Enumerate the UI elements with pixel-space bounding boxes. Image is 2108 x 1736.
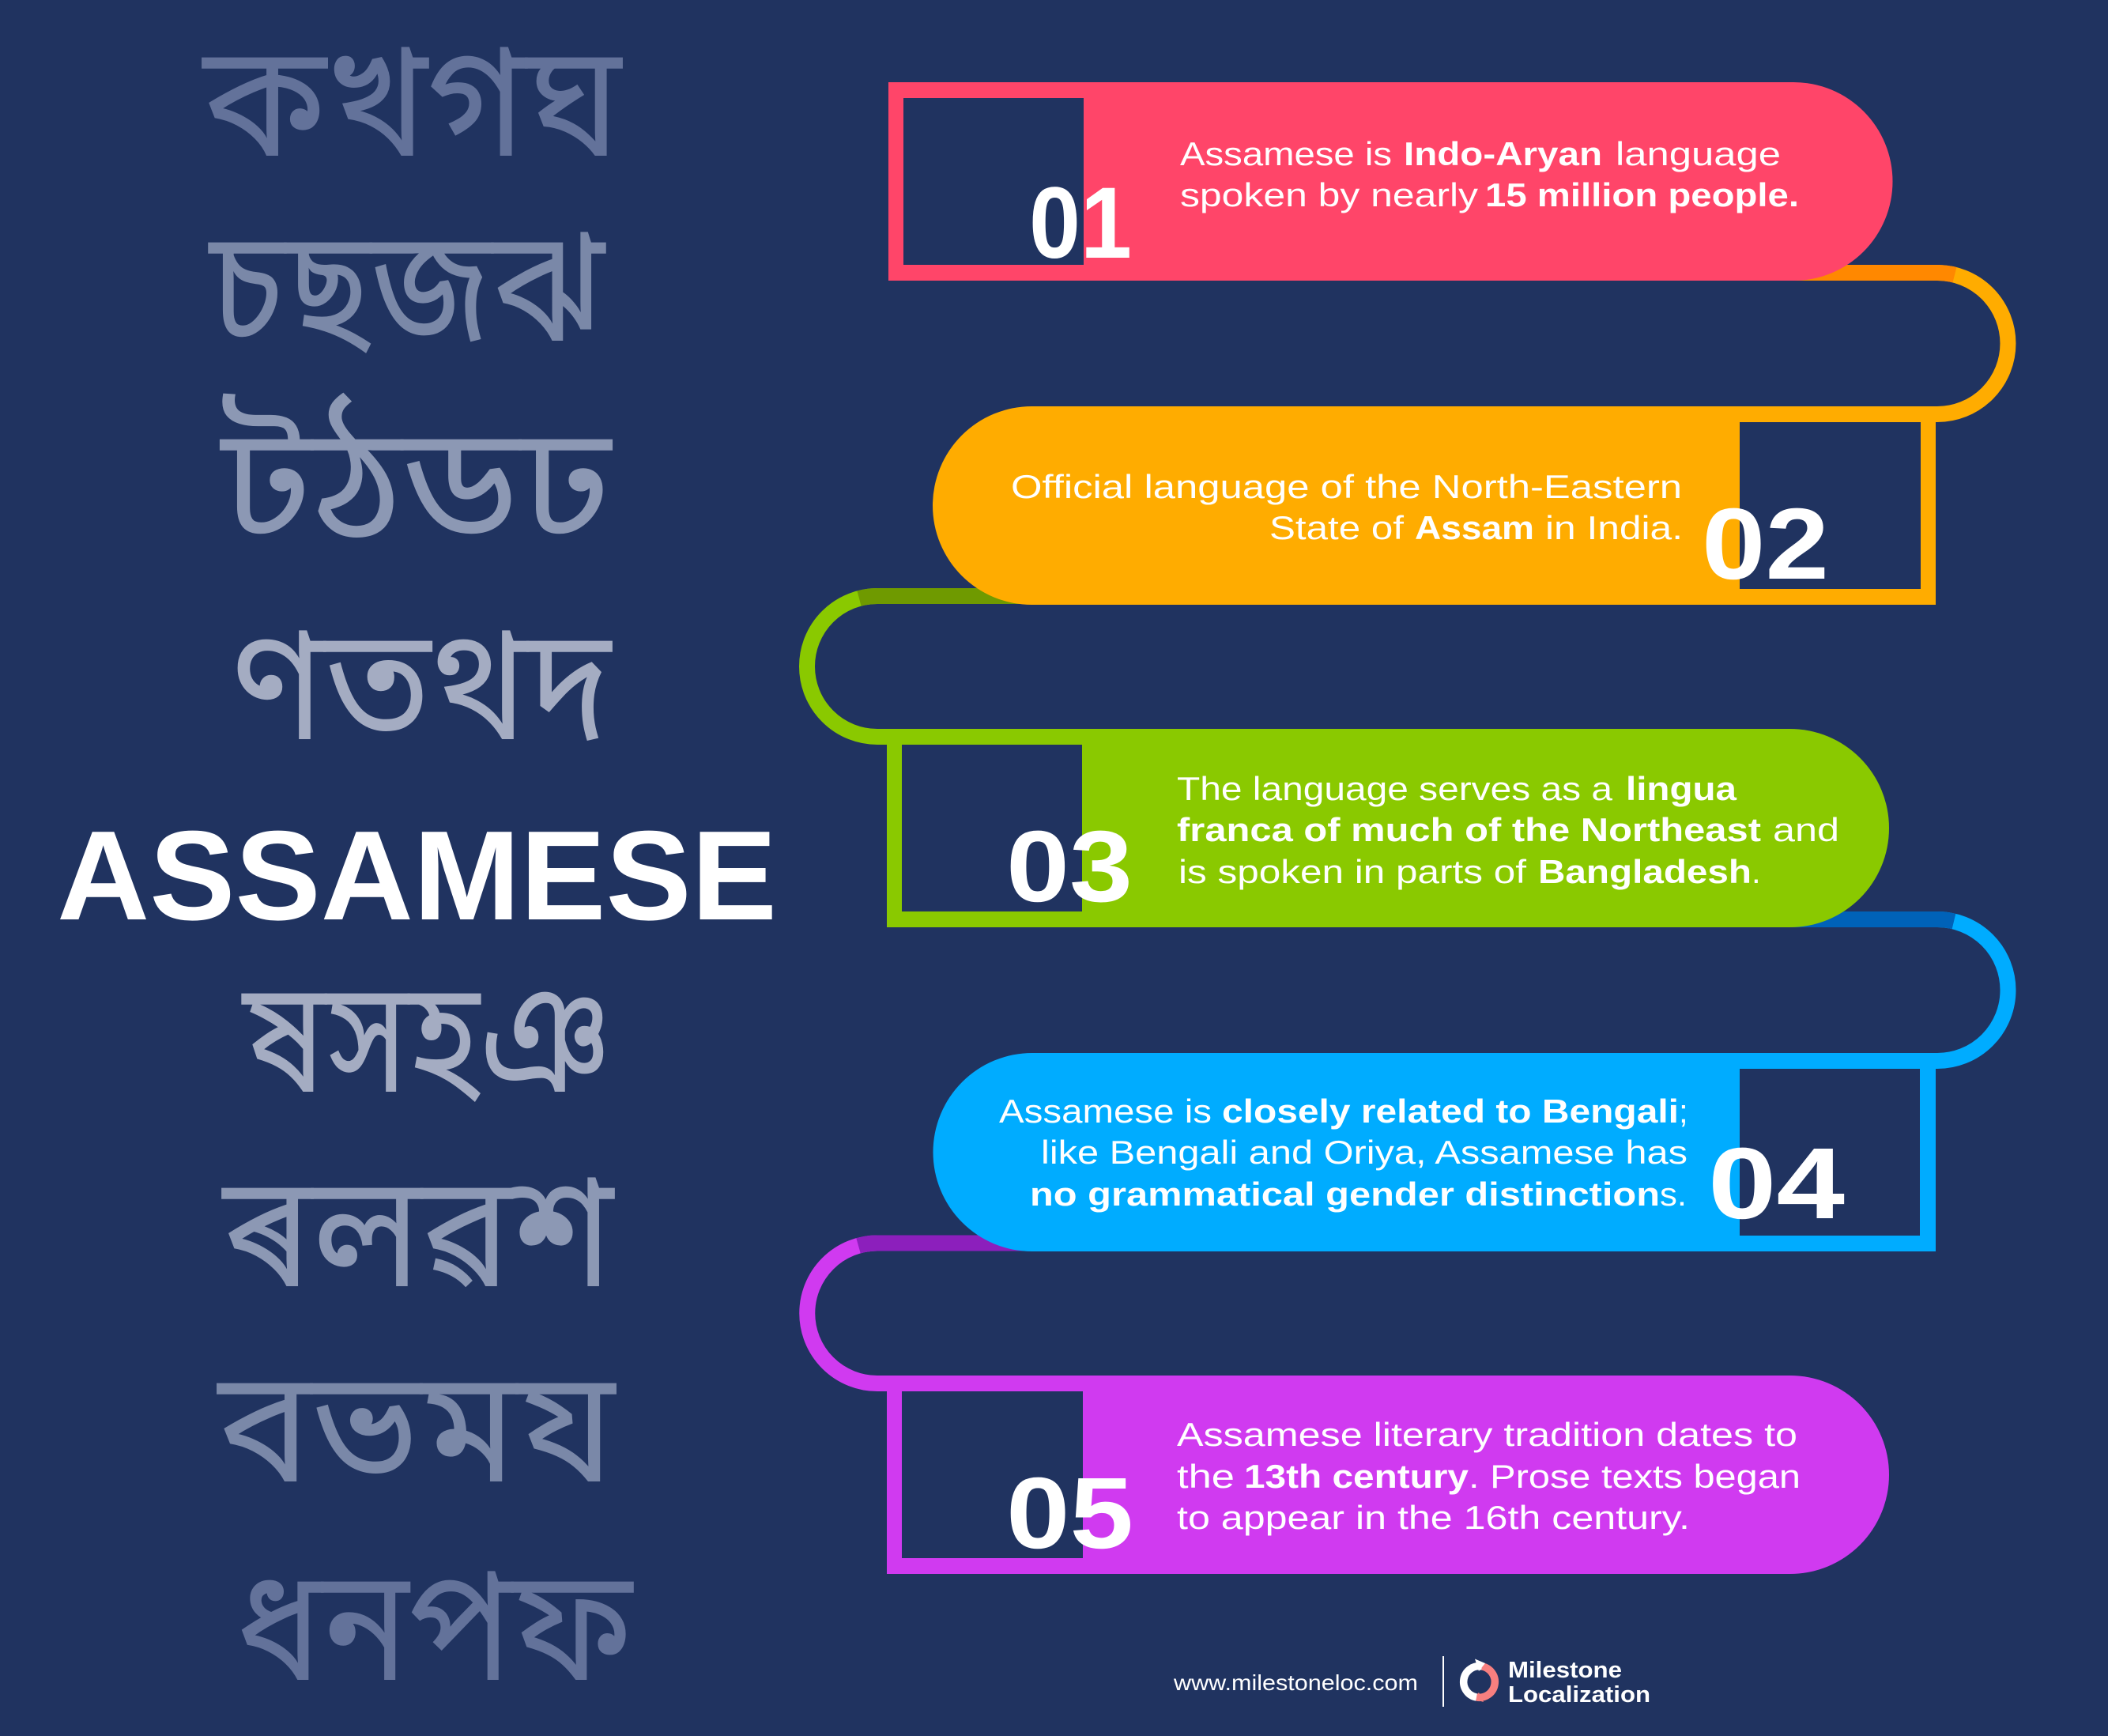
panel text: closely related to Bengali: [1222, 1093, 1679, 1130]
panel text: franca of much of the Northeast: [1177, 811, 1761, 848]
panel text: to appear in the 16th century.: [1177, 1499, 1690, 1536]
number 01: 01: [1029, 167, 1132, 280]
title: ASSAMESE: ASSAMESE: [57, 805, 777, 947]
panel shape: [933, 406, 1936, 605]
number 03: 03: [1006, 810, 1133, 923]
number box: [902, 745, 1082, 911]
number 02: 02: [1702, 488, 1829, 601]
panel text: like Bengali and Oriya, Assamese has: [1041, 1134, 1688, 1171]
panel 05: purple: [887, 1376, 1889, 1574]
number box: [1740, 1069, 1920, 1236]
panel shape: [888, 82, 1892, 281]
panel text: The language serves as a: [1177, 770, 1613, 807]
script row: ra la wa sha: ৰলৱশ: [221, 1144, 616, 1320]
connector: red to orange: [1739, 273, 2008, 414]
panel text: 15 million people.: [1485, 176, 1799, 213]
panel text: Assam: [1415, 509, 1534, 546]
script row: ba bha ma ya: বভময: [217, 1339, 617, 1515]
brand name: Localization: [1508, 1682, 1650, 1708]
script row: cha chha ja jha: চছজঝ: [208, 198, 606, 375]
script row: dha na pa pha: ধনপফ: [236, 1538, 634, 1714]
brand name: [1508, 1658, 1650, 1708]
panel text: no grammatical gender distinction: [1030, 1176, 1660, 1213]
panel text: is spoken in parts of: [1178, 853, 1526, 890]
panel text: the: [1177, 1458, 1235, 1495]
footer: [1173, 1656, 1650, 1708]
panel shape: [887, 729, 1889, 927]
brand name: Milestone: [1508, 1658, 1622, 1683]
script row: na ta tha da: ণতথদ: [232, 597, 613, 773]
panel 03: green: [887, 729, 1889, 927]
panel text: s.: [1660, 1176, 1687, 1213]
panel text: Assamese is: [999, 1093, 1212, 1130]
connector: orange to green: [807, 596, 1083, 737]
number 04: 04: [1708, 1127, 1845, 1240]
number box: [902, 1391, 1083, 1558]
panel text: Assamese literary tradition dates to: [1177, 1416, 1797, 1453]
panel text: in India.: [1545, 509, 1683, 546]
panel text: Assamese is: [1180, 135, 1392, 172]
panel text: lingua: [1626, 770, 1737, 807]
connector: green to blue: [1739, 919, 2008, 1061]
panel text: Bangladesh: [1538, 853, 1752, 890]
number box: [1740, 422, 1921, 589]
panel text: ;: [1679, 1093, 1688, 1130]
panel text: .: [1752, 853, 1761, 890]
panel text: [1177, 1416, 1801, 1536]
panel text: 13th century: [1244, 1458, 1469, 1495]
panel text: [1180, 135, 1799, 213]
script row: ka kha ga gha: কখগঘ: [202, 13, 624, 190]
panel text: . Prose texts began: [1469, 1458, 1801, 1495]
script rows and title column: [57, 13, 777, 1714]
panel text: [1177, 770, 1839, 890]
script row: ta tha da dha: টঠডঢ: [220, 391, 613, 572]
panel shape: [933, 1053, 1936, 1251]
panel text: State of: [1269, 509, 1404, 546]
panel 04: blue: [933, 1053, 1936, 1251]
panel text: and: [1773, 811, 1839, 848]
panel text: [1011, 468, 1683, 546]
website url: www.milestoneloc.com: [1173, 1670, 1418, 1695]
panel text: Indo-Aryan: [1404, 135, 1602, 172]
connector: blue to purple: [807, 1243, 1083, 1383]
number 05: 05: [1006, 1457, 1133, 1570]
panel 02: orange: [933, 406, 1936, 605]
panel text: language: [1616, 135, 1781, 172]
panel shape: [887, 1376, 1889, 1574]
panel text: spoken by nearly: [1180, 176, 1478, 213]
panel text: Official language of the North-Eastern: [1011, 468, 1682, 505]
panel text: [999, 1093, 1688, 1213]
footer divider: [1442, 1656, 1444, 1707]
icon: milestone logo ring: [1464, 1659, 1495, 1702]
number box: [903, 98, 1084, 265]
panel 01: red: [888, 82, 1892, 281]
script row: sha sa ha nya: ষসহঞ: [241, 949, 612, 1126]
